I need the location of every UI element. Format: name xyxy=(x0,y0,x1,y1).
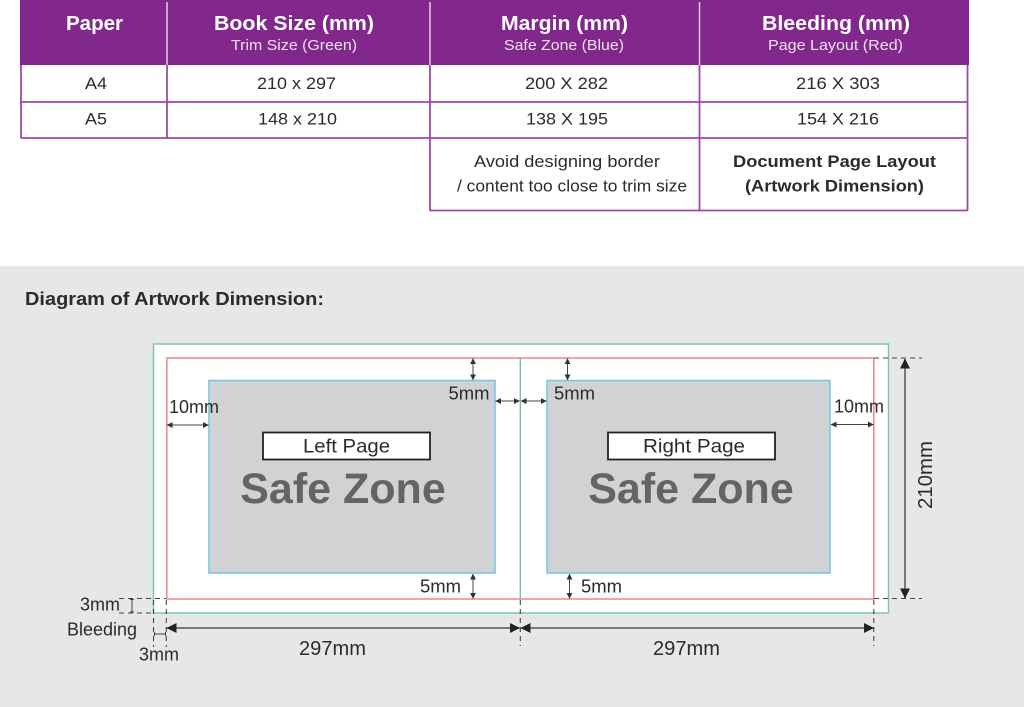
row A4 xyxy=(85,74,880,93)
row A4: A4 xyxy=(85,74,107,93)
table header xyxy=(20,0,969,65)
row A5: 148 x 210 xyxy=(258,110,337,128)
size table xyxy=(20,0,969,211)
bleed labels: 3mm xyxy=(139,644,179,664)
table header: Safe Zone (Blue) xyxy=(504,37,624,54)
row A4: 210 x 297 xyxy=(257,74,336,93)
margin labels: 10mm xyxy=(834,396,884,416)
left page label xyxy=(263,432,430,460)
artwork dimension note xyxy=(733,152,936,196)
left safe zone xyxy=(209,380,495,573)
safe zone note xyxy=(457,152,687,196)
table grid xyxy=(21,65,968,211)
artwork dimension note: (Artwork Dimension) xyxy=(745,176,924,196)
row A4: 200 X 282 xyxy=(525,74,608,93)
dashed guides xyxy=(119,358,922,647)
spine line xyxy=(519,358,521,599)
safe zone note: Avoid designing border xyxy=(474,152,660,171)
row A5: 154 X 216 xyxy=(797,110,879,128)
diagram heading: Diagram of Artwork Dimension: xyxy=(25,289,324,309)
margin labels: 5mm xyxy=(420,576,461,596)
row A4: 216 X 303 xyxy=(796,74,880,93)
row A5: A5 xyxy=(85,110,107,128)
table header: Bleeding (mm) xyxy=(762,13,910,35)
table header: Trim Size (Green) xyxy=(231,37,357,54)
table header: Page Layout (Red) xyxy=(768,37,903,54)
width labels xyxy=(299,638,720,660)
width dimension arrow: right page xyxy=(521,627,874,629)
margin labels: 5mm xyxy=(554,384,595,404)
safe zone note: / content too close to trim size xyxy=(457,176,687,196)
bleed ticks xyxy=(130,599,166,636)
right safe zone xyxy=(547,380,830,573)
margin labels: 5mm xyxy=(581,576,622,596)
left safe zone: Safe Zone xyxy=(240,465,446,513)
trim size outline xyxy=(154,344,888,613)
width labels: 297mm xyxy=(299,638,366,660)
artwork dimension note: Document Page Layout xyxy=(733,152,936,171)
width labels: 297mm xyxy=(653,638,720,660)
height label: 210mm xyxy=(915,441,937,509)
right safe zone: Safe Zone xyxy=(588,465,794,513)
margin labels xyxy=(169,384,884,596)
right page label: Right Page xyxy=(643,436,745,458)
table header: Book Size (mm) xyxy=(214,13,374,35)
margin labels: 10mm xyxy=(169,397,219,417)
margin labels: 5mm xyxy=(448,384,490,404)
bleed outline xyxy=(167,358,874,599)
table header: Margin (mm) xyxy=(501,13,628,35)
left page label: Left Page xyxy=(303,436,390,458)
row A5 xyxy=(85,110,879,128)
width dimension arrow: left page xyxy=(167,627,520,629)
right page label xyxy=(608,432,775,460)
panel: artwork diagram xyxy=(0,266,1024,707)
bleed labels: 3mm xyxy=(80,594,120,614)
row A5: 138 X 195 xyxy=(526,110,608,128)
table header: Paper xyxy=(66,13,123,35)
bleed labels: Bleeding xyxy=(67,620,137,640)
bleed labels xyxy=(67,594,179,664)
margin arrows xyxy=(167,358,874,598)
height dimension arrow xyxy=(904,359,906,598)
